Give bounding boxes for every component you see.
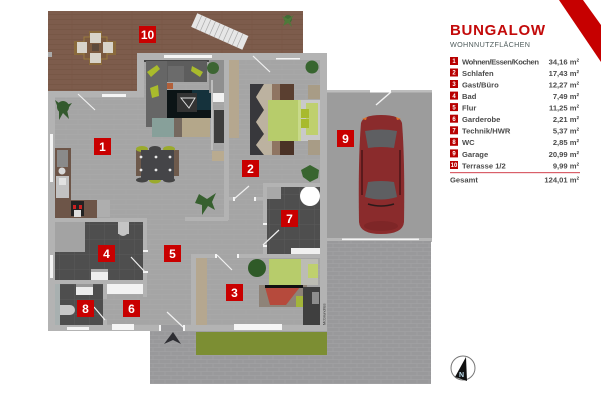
area table: Gesamt xyxy=(450,176,478,184)
room number labels: 4 xyxy=(103,247,110,261)
room number labels: 6 xyxy=(128,302,135,316)
decorative red corner band xyxy=(559,0,601,62)
rug xyxy=(250,84,294,155)
area table: 2 xyxy=(452,71,456,77)
area table: 5 xyxy=(452,105,456,111)
rug xyxy=(259,285,307,307)
area table: 8 xyxy=(452,140,456,146)
entrance arrow xyxy=(164,332,181,344)
interior floor xyxy=(55,60,320,325)
area table: 12,27 m² xyxy=(549,80,579,89)
plants xyxy=(301,60,319,182)
area table: 17,43 m² xyxy=(549,69,579,78)
room number labels: 3 xyxy=(231,286,238,300)
heading: BUNGALOW xyxy=(450,22,546,39)
bedroom 2 furniture xyxy=(228,59,320,182)
area table: Technik/HWR xyxy=(462,127,511,136)
area table: Wohnen/Essen/Kochen xyxy=(462,57,539,66)
coffee table xyxy=(167,90,211,118)
desk xyxy=(296,287,320,325)
north compass icon xyxy=(451,356,475,381)
area table: 11,25 m² xyxy=(549,104,579,112)
area table: 2,85 m² xyxy=(553,138,579,147)
room number labels: 9 xyxy=(342,132,349,146)
room number labels: 1 xyxy=(99,140,106,154)
area table: 9,99 m² xyxy=(553,161,579,170)
area table: 6 xyxy=(452,117,456,123)
area table: 10 xyxy=(451,163,458,169)
area table: 5,37 m² xyxy=(553,127,579,136)
bed xyxy=(269,259,318,285)
area table: Schlafen xyxy=(462,69,494,78)
room number labels: 5 xyxy=(169,247,176,261)
area table: WC xyxy=(462,138,475,147)
terrace plant xyxy=(282,15,294,27)
area table: 1 xyxy=(452,59,456,65)
windows and doors xyxy=(50,55,300,331)
plant xyxy=(207,62,219,74)
living room furniture xyxy=(55,59,224,218)
room number labels: 2 xyxy=(247,162,254,176)
paving xyxy=(150,241,431,384)
wc xyxy=(55,284,103,325)
area table: 3 xyxy=(452,82,456,88)
bath xyxy=(55,222,143,294)
area table: 20,99 m² xyxy=(549,150,579,159)
area table: Garage xyxy=(462,150,488,159)
subheading: WOHNNUTZFLÄCHEN xyxy=(450,40,530,49)
garage xyxy=(327,90,432,242)
grass xyxy=(196,332,327,355)
planter xyxy=(195,193,216,215)
entrance threshold xyxy=(160,325,183,331)
nightstands xyxy=(308,85,320,155)
area table: 7 xyxy=(452,128,456,134)
area table: 4 xyxy=(452,94,456,100)
area table: 34,16 m² xyxy=(549,57,579,66)
area table: 2,21 m² xyxy=(553,115,579,124)
sofa xyxy=(144,59,212,127)
car xyxy=(359,115,404,234)
credit: McGrundriss xyxy=(322,303,326,325)
room number labels: 8 xyxy=(82,302,89,316)
kitchen xyxy=(55,148,110,218)
area table: 9 xyxy=(452,152,456,158)
rug xyxy=(152,118,210,137)
area table: Garderobe xyxy=(462,115,500,124)
media partition xyxy=(209,60,224,161)
area table: Bad xyxy=(462,92,477,101)
plant xyxy=(248,259,266,277)
dining table xyxy=(136,146,179,184)
floor plan xyxy=(48,11,432,384)
sun lounger xyxy=(191,13,248,50)
room number labels: 10 xyxy=(141,28,154,42)
north compass icon: N xyxy=(459,372,464,379)
area table: 7,49 m² xyxy=(553,92,579,101)
terrace dining set xyxy=(74,31,116,65)
technik room xyxy=(267,186,320,255)
room number labels: 7 xyxy=(286,212,293,226)
walls xyxy=(48,53,327,331)
area table: Terrasse 1/2 xyxy=(462,161,506,170)
area table xyxy=(450,57,580,184)
bed xyxy=(268,100,318,141)
room 3 furniture xyxy=(196,258,320,325)
area table: Gast/Büro xyxy=(462,80,499,89)
area table: Flur xyxy=(462,104,476,112)
corner plant xyxy=(55,100,72,120)
terrace xyxy=(48,11,303,91)
area table: 124,01 m² xyxy=(544,176,579,184)
room number labels xyxy=(77,26,354,317)
